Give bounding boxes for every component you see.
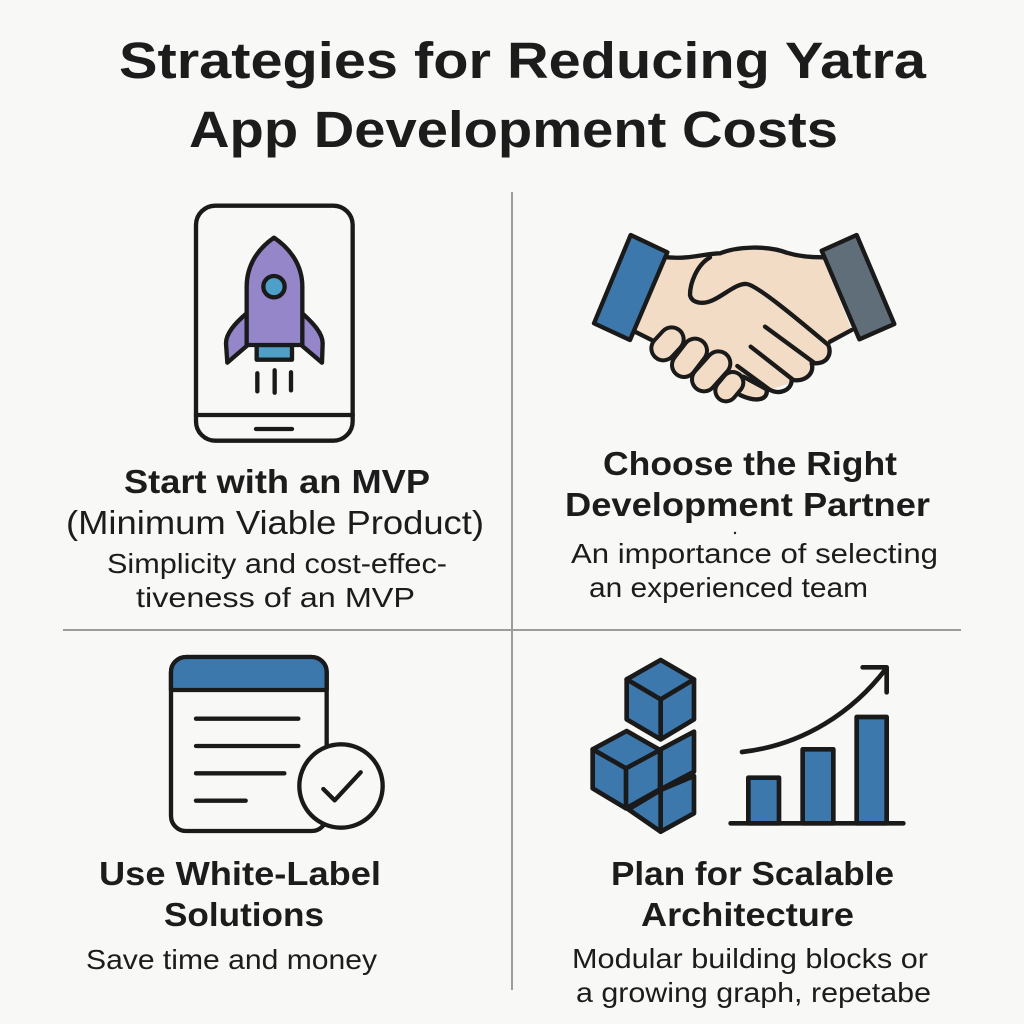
- title: Strategies for Reducing Yatra: [119, 32, 927, 89]
- title: App Development Costs: [189, 101, 838, 158]
- text: partner description: An importance of selecting: [571, 538, 938, 569]
- heading: choose the right development partner: [565, 445, 930, 523]
- panel: start with an MVP: [66, 206, 484, 613]
- text: white-label description: Save time and money: [86, 944, 377, 975]
- chart: growing bars with arrow: [731, 667, 903, 823]
- text: partner description: an experienced team: [589, 572, 868, 603]
- text: architecture description: a growing graph, repetabe: [576, 977, 931, 1008]
- panel: plan for scalable architecture: [572, 660, 931, 1008]
- text: MVP description: [107, 548, 447, 613]
- icon: handshake: [594, 235, 894, 399]
- icon: document with check badge: [171, 657, 383, 831]
- heading: plan for scalable architecture: Architecture: [641, 896, 854, 933]
- text: partner description: [571, 532, 938, 603]
- heading: use white-label solutions: Use White-Label: [99, 855, 381, 892]
- icon: modular cubes: [593, 660, 694, 832]
- heading: start with an MVP: Start with an MVP: [124, 463, 430, 500]
- heading: start with an MVP: (Minimum Viable Product): [66, 504, 484, 541]
- heading: use white-label solutions: [99, 855, 381, 933]
- heading: plan for scalable architecture: [611, 855, 894, 933]
- text: architecture description: [572, 943, 931, 1008]
- panel: use white-label solutions: [86, 657, 383, 975]
- text: MVP description: tiveness of an MVP: [136, 582, 415, 613]
- panel: choose the right development partner: [565, 235, 938, 603]
- heading: plan for scalable architecture: Plan for Scalable: [611, 855, 894, 892]
- heading: start with an MVP: [66, 463, 484, 541]
- text: architecture description: Modular building blocks or: [572, 943, 928, 974]
- icon: phone with rocket: [196, 206, 353, 441]
- heading: choose the right development partner: Choose the Right: [603, 445, 897, 482]
- title: [119, 32, 927, 158]
- heading: choose the right development partner: Development Partner: [565, 486, 930, 523]
- heading: use white-label solutions: Solutions: [164, 896, 324, 933]
- finger outlines and fills: [663, 339, 733, 391]
- text: MVP description: Simplicity and cost-effec-: [107, 548, 447, 579]
